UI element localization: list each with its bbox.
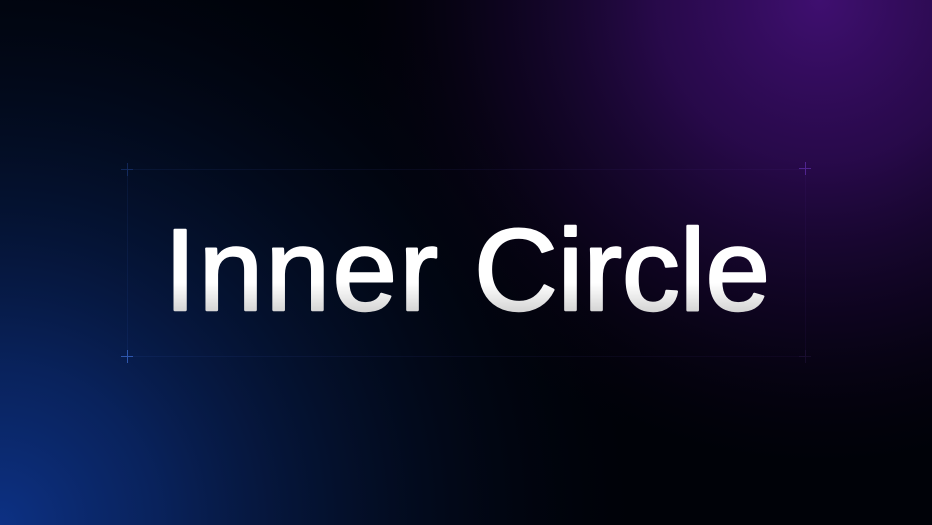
icon: plus mark top left <box>121 163 133 176</box>
icon: plus mark bottom right <box>799 350 811 363</box>
icon: plus mark bottom left <box>121 350 133 363</box>
title: Inner <box>164 205 438 335</box>
title: Circle <box>474 205 770 335</box>
icon: plus mark top right <box>799 162 811 175</box>
decorative frame around title <box>121 162 811 363</box>
title <box>164 205 770 335</box>
